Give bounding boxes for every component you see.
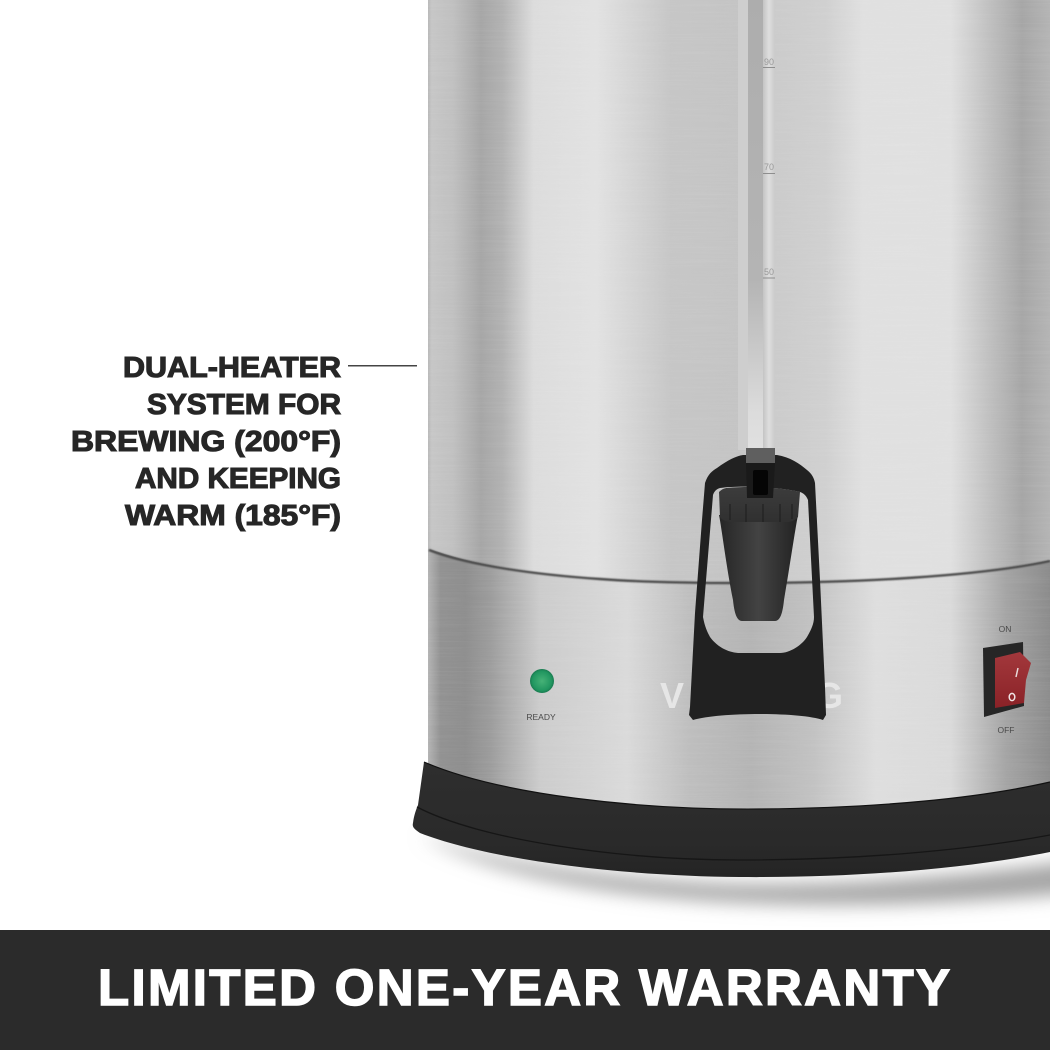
banner title: LIMITED ONE-YEAR WARRANTY bbox=[98, 959, 950, 1016]
water level gauge bbox=[738, 0, 775, 450]
urn product photo bbox=[413, 0, 1050, 905]
callout text: SYSTEM FOR bbox=[147, 389, 341, 421]
ready label: READY bbox=[526, 712, 556, 722]
lower steel base bbox=[428, 548, 1050, 830]
callout text: BREWING (200°F) bbox=[71, 426, 341, 458]
gauge marks bbox=[763, 68, 775, 278]
warranty banner bbox=[0, 930, 1050, 1050]
callout: dual-heater system bbox=[71, 352, 417, 532]
rocker power switch: OFF bbox=[998, 725, 1014, 735]
floor shadow bbox=[420, 835, 1050, 905]
callout text: WARM (185°F) bbox=[125, 500, 341, 532]
rocker power switch bbox=[983, 624, 1031, 735]
ready indicator light bbox=[526, 669, 556, 722]
black spigot faucet bbox=[689, 448, 826, 720]
gauge numbers: 70 bbox=[764, 162, 774, 172]
gauge numbers: 50 bbox=[764, 267, 774, 277]
callout text: DUAL-HEATER bbox=[123, 352, 341, 384]
switch labels: ON bbox=[999, 624, 1011, 634]
embossed brand mark bbox=[660, 675, 843, 716]
embossed brand mark: G bbox=[815, 675, 843, 716]
seam between body and base bbox=[429, 550, 1050, 583]
embossed brand mark: V bbox=[660, 675, 684, 716]
callout text bbox=[71, 352, 341, 532]
brushed metal texture bbox=[428, 0, 1050, 830]
callout text: AND KEEPING bbox=[135, 463, 341, 495]
gauge numbers: 90 bbox=[764, 57, 774, 67]
callout leader line bbox=[348, 365, 417, 366]
upper steel body bbox=[428, 0, 1050, 582]
gauge numbers bbox=[764, 57, 774, 277]
black rubber foot bbox=[413, 762, 1050, 877]
